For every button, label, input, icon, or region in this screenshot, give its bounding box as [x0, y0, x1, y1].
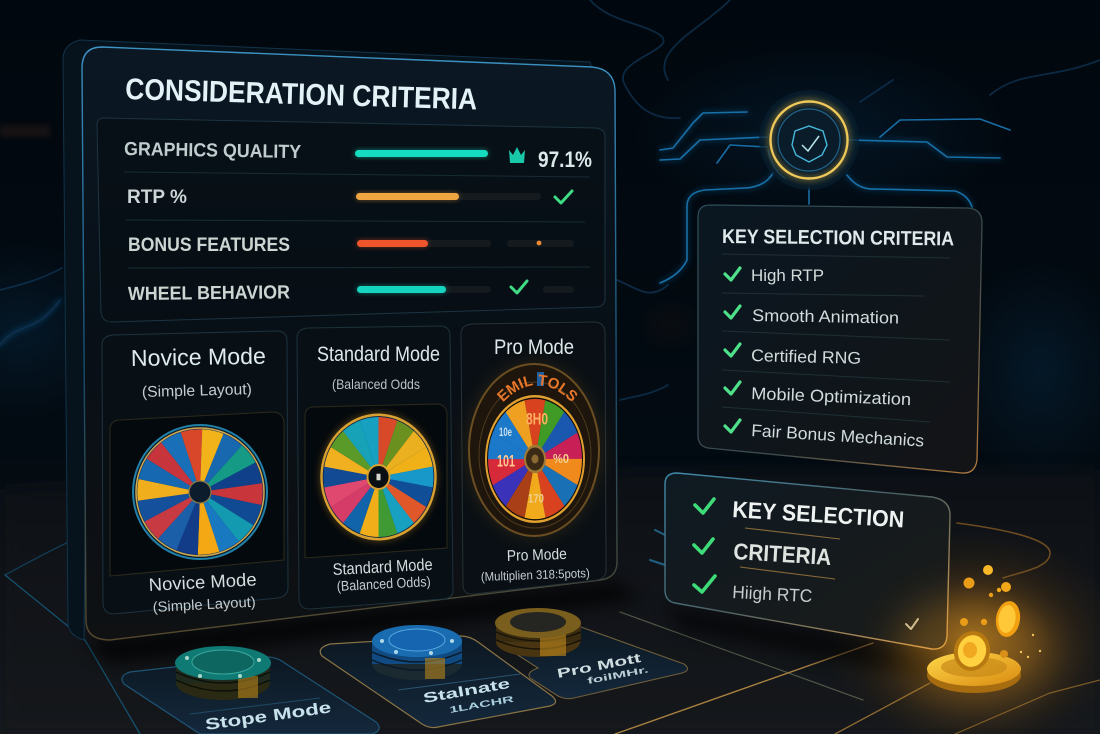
- row: graphics quality: GRAPHICS QUALITY: [124, 139, 302, 163]
- panel shadow: [85, 582, 640, 665]
- heading: CONSIDERATION CRITERIA: [125, 73, 478, 116]
- wheel well: [305, 404, 447, 558]
- plaque text: Stalnate: [422, 675, 512, 706]
- pro wheel: 170: [528, 494, 544, 506]
- text: high rtc: Hiigh RTC: [732, 582, 813, 606]
- panel face: [82, 47, 617, 640]
- row: graphics quality: [124, 139, 592, 172]
- caption: balanced odds: (Balanced Odds): [336, 573, 431, 594]
- badge: shield check: [759, 90, 859, 190]
- main panel: consideration criteria: [62, 40, 618, 641]
- caption: simple layout: (Simple Layout): [152, 595, 256, 616]
- panel back edge: [63, 40, 592, 640]
- item: mobile optimization: Mobile Optimization: [751, 384, 911, 409]
- row: wheel behavior: [128, 281, 574, 305]
- standard wheel: [318, 412, 438, 542]
- row: graphics quality: 97.1%: [538, 147, 592, 172]
- panel: key selection criteria: [698, 205, 982, 473]
- check marks: [694, 499, 715, 592]
- pro wheel: %0: [553, 453, 569, 466]
- caption: multiplier: (Multiplien 318:5pots): [481, 566, 590, 584]
- pro wheel: 101: [497, 452, 515, 471]
- row: wheel behavior: WHEEL BEHAVIOR: [128, 282, 290, 305]
- subtitle: simple layout: (Simple Layout): [142, 381, 252, 401]
- item: certified rng: Certified RNG: [751, 346, 861, 368]
- row: rtp: [127, 187, 572, 208]
- circuit lines: [0, 0, 1100, 400]
- plaque with chip: standard: [320, 625, 556, 728]
- pro wheel: 10e: [499, 427, 512, 439]
- subtitle: balanced odds: (Balanced Odds: [332, 376, 420, 392]
- card: pro mode: [460, 322, 606, 594]
- plaque subtext: foilMHr.: [586, 664, 649, 686]
- caption: novice mode: Novice Mode: [148, 569, 257, 595]
- panel: key selection callout: [665, 473, 950, 649]
- heading: pro mode: Pro Mode: [494, 336, 574, 359]
- pro wheel: [466, 362, 602, 538]
- plaque text: Pro Mott: [556, 650, 643, 681]
- item: fair bonus mechanics: Fair Bonus Mechanics: [751, 421, 925, 451]
- card: standard mode: [297, 326, 453, 609]
- plaque with chip: pro: [495, 608, 688, 699]
- heading: KEY SELECTION CRITERIA: [722, 226, 954, 250]
- heading: standard mode: Standard Mode: [317, 343, 440, 366]
- plaque subtext: 1LACHR: [449, 694, 515, 715]
- heading: novice mode: Novice Mode: [131, 343, 266, 371]
- row: bonus features: [128, 235, 574, 256]
- item: high rtp: High RTP: [751, 266, 824, 285]
- arc label: EMIL TOLS: [496, 374, 578, 402]
- caption: standard mode: Standard Mode: [332, 556, 433, 579]
- pro wheel: 8H0: [526, 410, 548, 429]
- caption: pro mode: Pro Mode: [507, 546, 567, 565]
- row: bonus features: BONUS FEATURES: [128, 235, 290, 256]
- criteria table: [97, 118, 605, 322]
- plaque text: Stope Mode: [204, 699, 332, 734]
- blue chip: [372, 625, 462, 680]
- coins: [895, 565, 1055, 705]
- wheel well: [110, 412, 284, 576]
- floor lines: [5, 520, 1100, 734]
- plaque with chip: novice: [122, 646, 379, 734]
- row: rtp: RTP %: [127, 187, 187, 208]
- heading line 2: CRITERIA: [733, 538, 832, 570]
- novice wheel: [133, 425, 267, 559]
- callout shadow: [665, 605, 947, 680]
- card: novice mode: [102, 331, 288, 616]
- small check: [906, 619, 918, 629]
- item: smooth animation: Smooth Animation: [752, 306, 899, 328]
- gold chip: [495, 608, 581, 657]
- heading line 1: KEY SELECTION: [732, 496, 905, 532]
- teal chip: [175, 646, 271, 700]
